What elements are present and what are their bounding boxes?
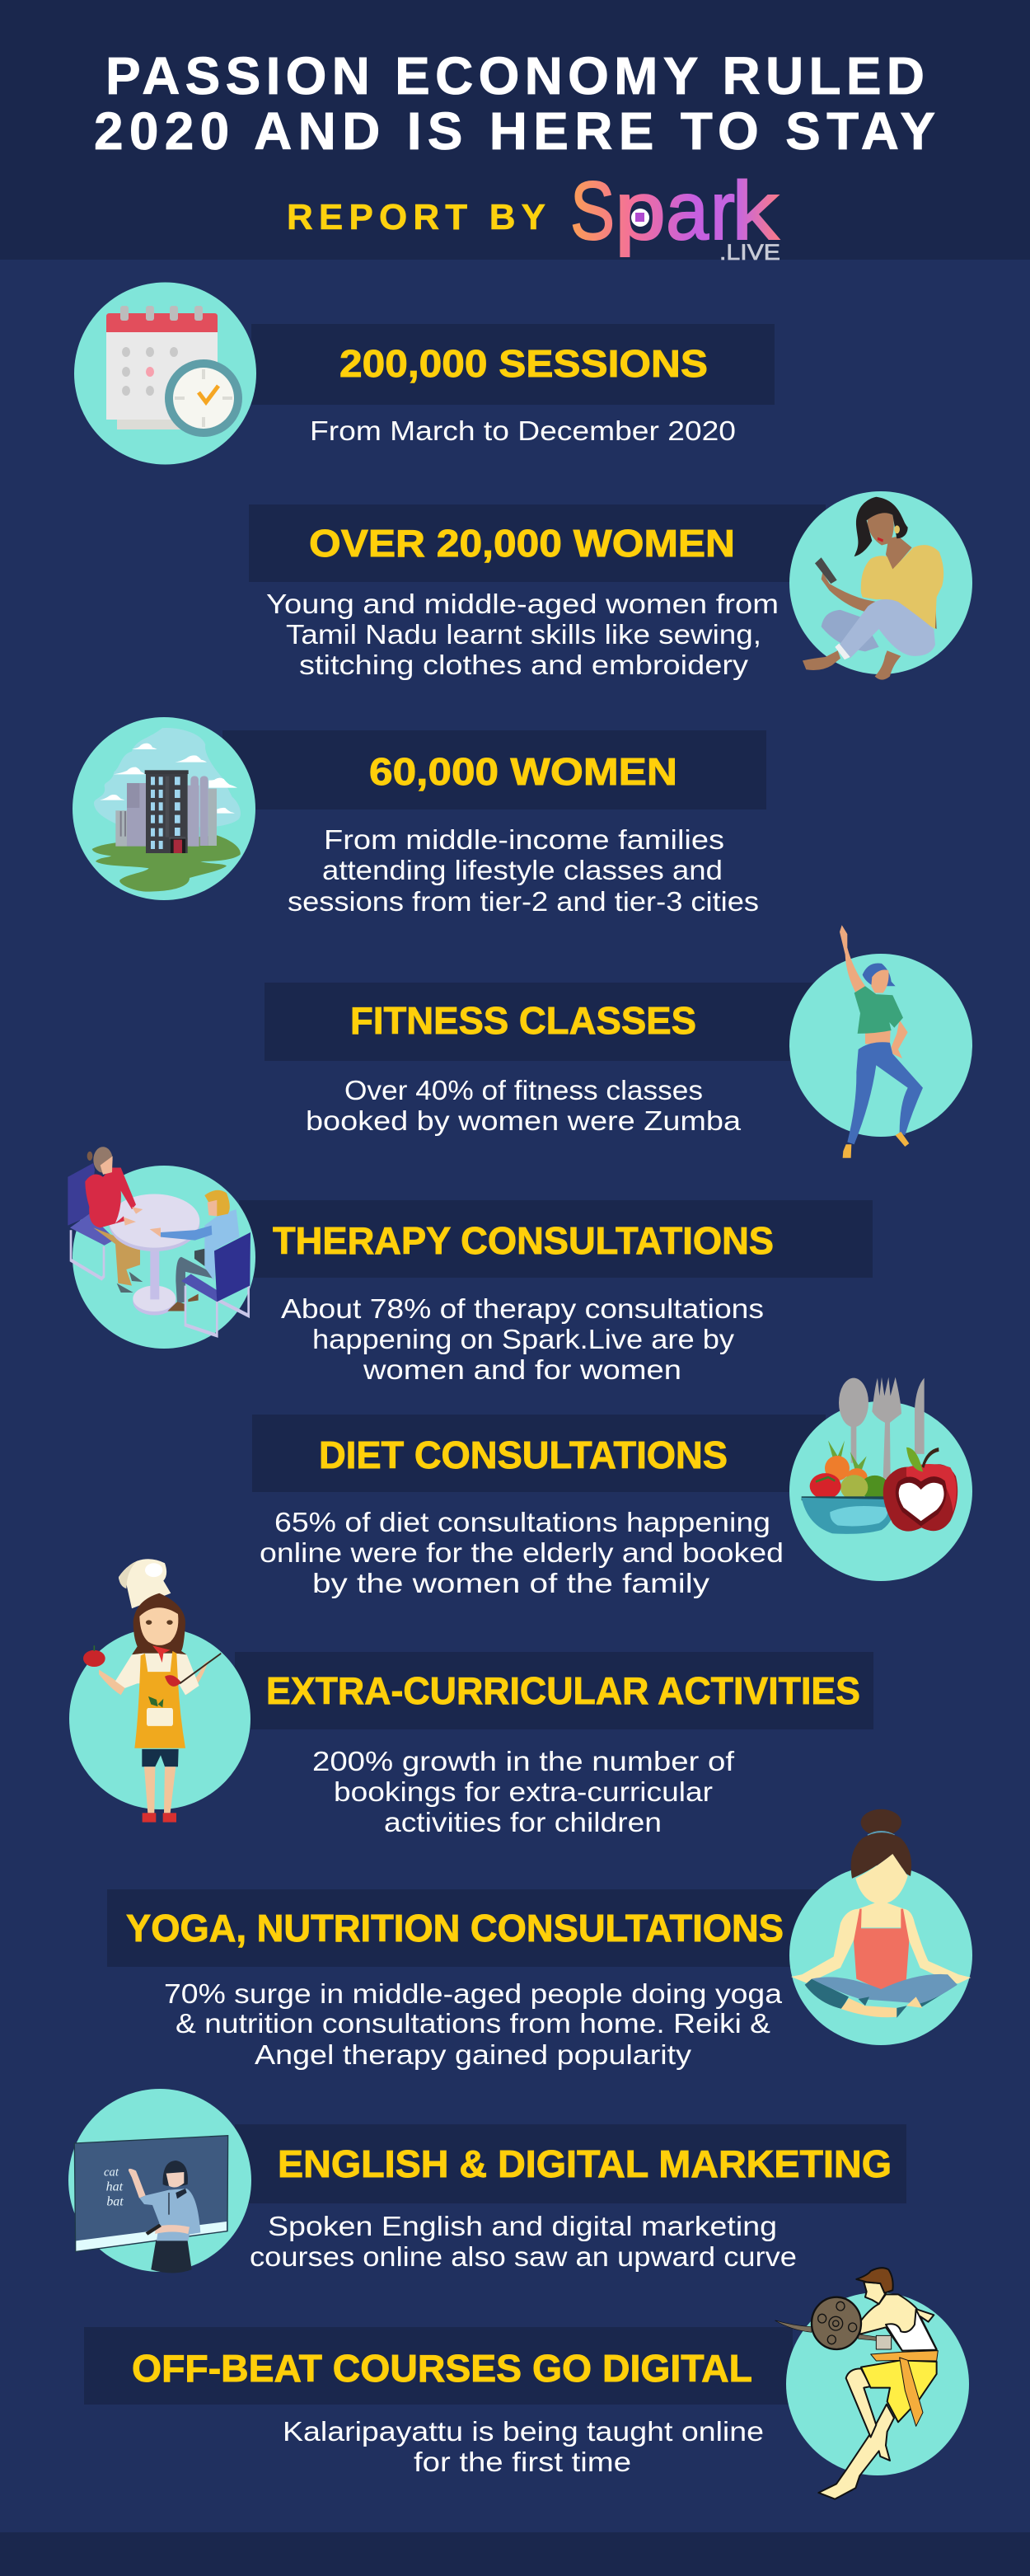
circle bbox=[789, 954, 972, 1137]
icon: teacher at chalkboard: cat bbox=[104, 2165, 119, 2179]
panel: English and digital marketing bbox=[68, 2089, 906, 2273]
text bbox=[266, 589, 779, 680]
heading bar bbox=[265, 983, 825, 1061]
heading: ENGLISH & DIGITAL MARKETING bbox=[278, 2142, 892, 2185]
Spark.Live logo: k bbox=[732, 165, 780, 257]
footer band bbox=[0, 2532, 1030, 2576]
text: From middle-income families bbox=[324, 824, 724, 855]
text: courses online also saw an upward curve bbox=[250, 2241, 797, 2272]
panel: 200,000 sessions bbox=[74, 282, 775, 465]
icon: teacher at chalkboard: hat bbox=[106, 2180, 124, 2194]
icon: city buildings bbox=[92, 728, 241, 892]
icon: yoga woman bbox=[791, 1809, 971, 2018]
circle bbox=[74, 282, 256, 465]
text bbox=[250, 2211, 797, 2272]
Spark.Live logo: S bbox=[570, 165, 615, 257]
icon: Kalaripayattu warrior bbox=[775, 2268, 938, 2499]
icon: two people at a table bbox=[68, 1147, 250, 1335]
text bbox=[306, 1075, 742, 1136]
text bbox=[288, 824, 759, 917]
text: sessions from tier-2 and tier-3 cities bbox=[288, 886, 759, 917]
heading: OVER 20,000 WOMEN bbox=[309, 522, 735, 565]
panel: over 20,000 women bbox=[249, 491, 972, 680]
heading: YOGA, NUTRITION CONSULTATIONS bbox=[126, 1907, 784, 1950]
heading: THERAPY CONSULTATIONS bbox=[273, 1219, 774, 1262]
text: 200% growth in the number of bbox=[312, 1746, 735, 1776]
circle bbox=[73, 1166, 255, 1349]
circle bbox=[68, 2089, 251, 2272]
heading: OFF-BEAT COURSES GO DIGITAL bbox=[132, 2347, 752, 2390]
heading bar bbox=[249, 504, 826, 582]
text: booked by women were Zumba bbox=[306, 1105, 742, 1136]
text: Angel therapy gained popularity bbox=[255, 2039, 692, 2070]
Spark.Live logo: r bbox=[710, 165, 735, 257]
icon: dancing woman bbox=[840, 925, 923, 1158]
panel: therapy consultations bbox=[68, 1147, 873, 1385]
icon: woman with phone bbox=[803, 497, 943, 680]
text bbox=[164, 1978, 783, 2070]
text bbox=[260, 1507, 784, 1598]
heading: 60,000 WOMEN bbox=[369, 750, 677, 793]
panel: off-beat courses go digital bbox=[84, 2268, 969, 2499]
text bbox=[281, 1293, 764, 1385]
circle bbox=[789, 491, 972, 674]
circle bbox=[73, 717, 255, 900]
text: happening on Spark.Live are by bbox=[312, 1324, 735, 1354]
heading bar bbox=[84, 2327, 793, 2405]
icon: teacher at chalkboard bbox=[74, 2136, 228, 2273]
heading: 200,000 SESSIONS bbox=[339, 342, 708, 385]
heading bar bbox=[222, 730, 766, 809]
text: for the first time bbox=[414, 2447, 631, 2477]
text: Tamil Nadu learnt skills like sewing, bbox=[286, 619, 761, 650]
text: Kalaripayattu is being taught online bbox=[283, 2416, 764, 2447]
panel: fitness classes bbox=[265, 925, 972, 1158]
text: attending lifestyle classes and bbox=[322, 855, 723, 885]
text: Over 40% of fitness classes bbox=[344, 1075, 703, 1105]
header band bbox=[0, 0, 1030, 265]
heading: DIET CONSULTATIONS bbox=[319, 1433, 728, 1476]
text: & nutrition consultations from home. Reiki & bbox=[176, 2008, 770, 2039]
text: women and for women bbox=[363, 1354, 681, 1385]
heading bar bbox=[235, 2124, 906, 2203]
text: activities for children bbox=[384, 1807, 662, 1837]
text: 65% of diet consultations happening bbox=[274, 1507, 770, 1537]
title: 2020 AND IS HERE TO STAY bbox=[94, 101, 935, 161]
circle bbox=[789, 1865, 972, 2045]
panel: 60,000 women bbox=[73, 717, 766, 917]
icon: food bowl and apple bbox=[802, 1377, 957, 1534]
text: 70% surge in middle-aged people doing yoga bbox=[164, 1978, 783, 2009]
Spark.Live logo: .LIVE bbox=[719, 240, 780, 265]
text: Spoken English and digital marketing bbox=[268, 2211, 777, 2241]
circle bbox=[789, 1401, 972, 1581]
text: online were for the elderly and booked bbox=[260, 1537, 784, 1568]
text: From March to December 2020 bbox=[310, 415, 736, 446]
circle bbox=[69, 1628, 250, 1809]
report by label: REPORT BY bbox=[287, 197, 545, 237]
heading bar bbox=[251, 324, 775, 405]
Spark.Live logo: a bbox=[666, 165, 709, 257]
circle bbox=[786, 2292, 969, 2475]
title: PASSION ECONOMY RULED bbox=[105, 46, 925, 106]
title bbox=[94, 46, 935, 161]
panel: diet consultations bbox=[252, 1377, 972, 1598]
panel: yoga, nutrition consultations bbox=[107, 1809, 972, 2070]
heading bar bbox=[235, 1652, 873, 1729]
icon: chef woman bbox=[83, 1559, 221, 1823]
heading: FITNESS CLASSES bbox=[350, 999, 696, 1042]
Spark.Live logo bbox=[570, 165, 780, 265]
heading bar bbox=[252, 1415, 826, 1492]
icon: teacher at chalkboard: bat bbox=[106, 2194, 124, 2208]
heading: EXTRA-CURRICULAR ACTIVITIES bbox=[266, 1669, 860, 1712]
text: stitching clothes and embroidery bbox=[299, 650, 749, 680]
Spark.Live logo: p bbox=[615, 165, 666, 257]
panel: extra-curricular activities bbox=[69, 1559, 873, 1837]
heading bar bbox=[239, 1200, 873, 1278]
text: by the women of the family bbox=[312, 1568, 710, 1598]
text: bookings for extra-curricular bbox=[334, 1776, 713, 1807]
icon: calendar and clock bbox=[106, 306, 242, 437]
text: About 78% of therapy consultations bbox=[281, 1293, 764, 1324]
text: Young and middle-aged women from bbox=[266, 589, 779, 619]
text bbox=[312, 1746, 735, 1837]
heading bar bbox=[107, 1889, 824, 1967]
text bbox=[283, 2416, 764, 2477]
